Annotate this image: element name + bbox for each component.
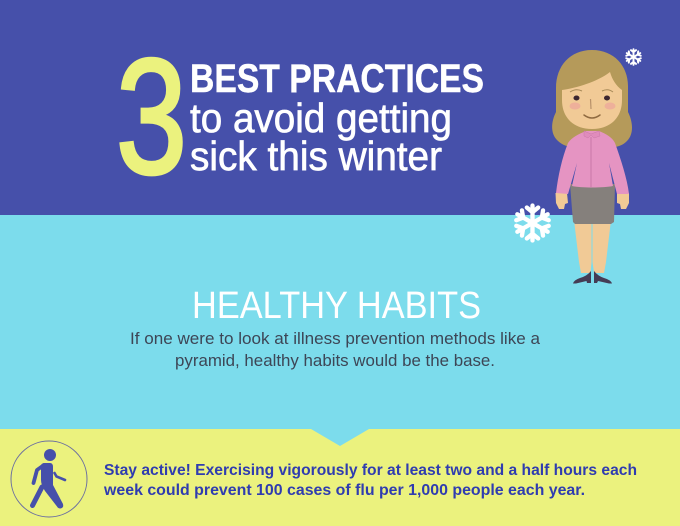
callout text	[103, 462, 637, 499]
callout text: Stay active! Exercising vigorously for at least two and a half hours each	[104, 462, 637, 479]
title: BEST PRACTICES	[190, 57, 484, 101]
text block: intro: pyramid, healthy habits would be the base.	[175, 352, 495, 370]
nose and mouth	[590, 99, 592, 109]
panel: stay active	[0, 429, 680, 526]
panel: header background	[0, 0, 680, 215]
text block: intro: If one were to look at illness prevention methods like a	[130, 330, 541, 348]
text block: intro	[130, 330, 541, 370]
title: to avoid getting	[190, 95, 452, 141]
panel: healthy habits background	[0, 215, 680, 430]
icon: small snowflake	[625, 49, 642, 65]
hair	[552, 50, 632, 147]
title	[190, 57, 484, 179]
title number 3: 3	[116, 25, 187, 208]
callout text: week could prevent 100 cases of flu per 1,000 people each year.	[103, 482, 585, 499]
eyes and brows	[570, 90, 613, 92]
icon: walking person	[11, 441, 87, 517]
shoes	[573, 271, 612, 284]
legs	[574, 220, 611, 273]
neck and face	[562, 72, 622, 129]
blouse	[556, 131, 629, 194]
cheeks	[570, 102, 580, 110]
illustration: woman	[552, 50, 632, 284]
skirt	[570, 184, 615, 224]
hands	[556, 193, 629, 209]
heading: healthy habits: HEALTHY HABITS	[192, 285, 481, 327]
title: sick this winter	[190, 133, 442, 179]
icon: large snowflake	[515, 205, 550, 241]
